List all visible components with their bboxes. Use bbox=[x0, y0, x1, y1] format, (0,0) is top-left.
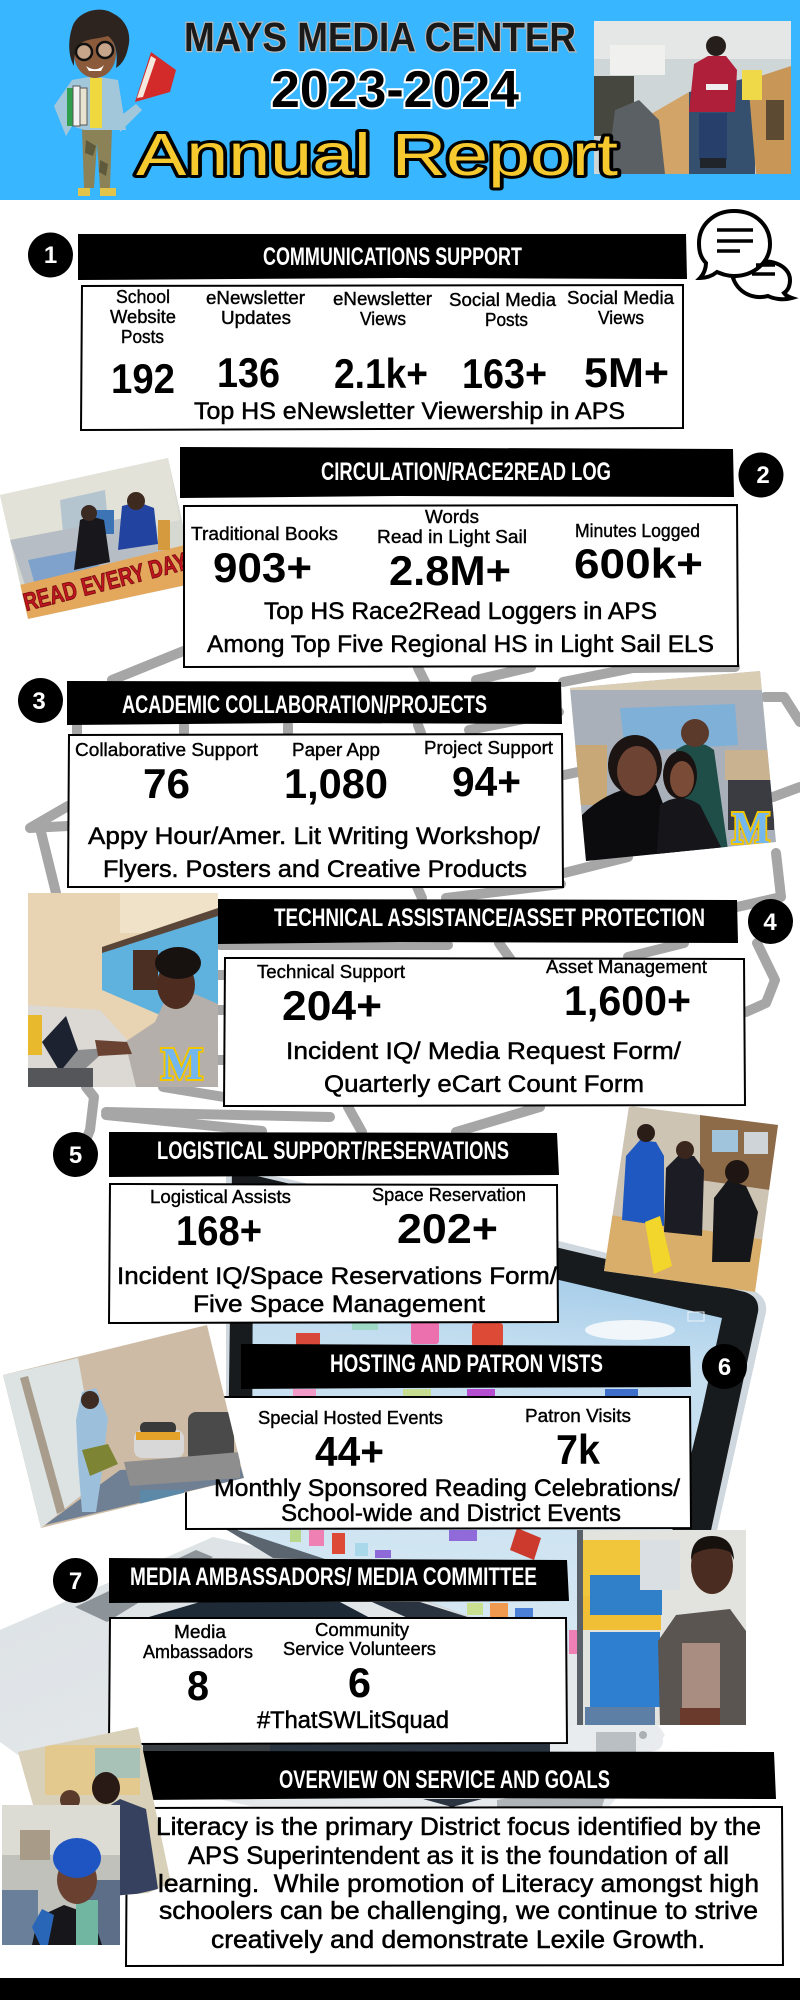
stat: technical support: 204+ bbox=[282, 982, 382, 1029]
stat: school website posts: Posts bbox=[121, 326, 164, 347]
logo letter: M bbox=[732, 802, 770, 853]
stat: logistical assists: 168+ bbox=[176, 1207, 262, 1254]
photo: staff selfie bbox=[565, 668, 780, 865]
number badge 7 bbox=[53, 1558, 98, 1603]
stat: community service volunteers bbox=[283, 1619, 436, 1706]
notes bbox=[286, 1038, 681, 1098]
photo: two staff members bbox=[18, 1727, 171, 1896]
stat: enewsletter updates bbox=[206, 287, 305, 396]
stat: community service volunteers: 6 bbox=[348, 1659, 371, 1706]
stats panel bbox=[109, 1618, 567, 1744]
stat: traditional books bbox=[191, 523, 338, 591]
stat: traditional books: 903+ bbox=[213, 544, 312, 591]
stat: patron visits bbox=[525, 1405, 631, 1473]
heading bar: COMMUNICATIONS SUPPORT bbox=[263, 243, 522, 271]
stat: words read: Words bbox=[425, 506, 479, 527]
photo: student at laptop bbox=[28, 893, 218, 1089]
number badge 4: 4 bbox=[763, 909, 777, 936]
stat: special hosted events: Special Hosted Events bbox=[258, 1407, 443, 1428]
heading bar bbox=[67, 681, 562, 725]
stat: patron visits: 7k bbox=[556, 1426, 601, 1473]
section 8: overview bbox=[2, 1725, 783, 1966]
photo: read every day bbox=[0, 458, 183, 619]
stat: space reservation: 202+ bbox=[397, 1205, 498, 1252]
number badge 6 bbox=[702, 1344, 747, 1389]
stat: technical support: Technical Support bbox=[257, 961, 405, 982]
stat: social media posts bbox=[449, 289, 557, 397]
heading bar: LOGISTICAL SUPPORT/RESERVATIONS bbox=[157, 1137, 509, 1165]
stat: enewsletter updates: Updates bbox=[221, 307, 291, 328]
stat: community service volunteers: Community bbox=[315, 1619, 410, 1640]
photo: cooking event bbox=[0, 1320, 250, 1530]
stat: school website posts: Website bbox=[110, 306, 176, 327]
heading bar bbox=[180, 447, 734, 498]
stat: social media posts: Social Media bbox=[449, 289, 557, 310]
stat: social media posts: 163+ bbox=[462, 350, 547, 397]
laptop screen bbox=[237, 1209, 722, 1680]
text panel bbox=[126, 1807, 783, 1966]
laptop hinge and keyboard bbox=[227, 1530, 328, 1560]
stat: words read: Read in Light Sail bbox=[377, 526, 527, 547]
section 1: communications support bbox=[28, 211, 792, 430]
section 5: logistical support bbox=[53, 1100, 785, 1323]
photo sign text: READ EVERY DAY bbox=[20, 548, 190, 617]
overview text: creatively and demonstrate Lexile Growth. bbox=[211, 1926, 705, 1954]
note: Top HS eNewsletter Viewership in APS bbox=[194, 398, 625, 425]
photo: three students bbox=[604, 1106, 778, 1292]
section 4: technical assistance bbox=[28, 893, 793, 1106]
icon: cartoon librarian avatar bbox=[54, 10, 176, 196]
stat: enewsletter updates: 136 bbox=[217, 349, 280, 396]
number badge 6: 6 bbox=[718, 1354, 731, 1381]
stat: space reservation bbox=[372, 1184, 526, 1252]
number badge 2: 2 bbox=[756, 462, 770, 489]
stat: paper app: Paper App bbox=[292, 739, 380, 760]
stats panel bbox=[68, 734, 563, 887]
stat: social media views: 5M+ bbox=[584, 349, 669, 396]
number badge 3 bbox=[18, 678, 63, 723]
stat: school website posts: 192 bbox=[111, 355, 175, 402]
stat: community service volunteers: Service Volunteers bbox=[283, 1638, 436, 1659]
stat: paper app: 1,080 bbox=[284, 760, 388, 807]
laptop base bbox=[0, 1537, 665, 1806]
stat: special hosted events bbox=[258, 1407, 443, 1475]
stats panel bbox=[109, 1184, 558, 1323]
stat: media ambassadors: Media bbox=[174, 1621, 227, 1642]
stat: words read bbox=[377, 506, 527, 594]
stat: social media views: Views bbox=[598, 307, 644, 328]
overview text bbox=[156, 1813, 761, 1954]
number badge 5: 5 bbox=[69, 1142, 82, 1169]
hashtag: #ThatSWLitSquad bbox=[257, 1707, 449, 1734]
app icons bbox=[290, 1320, 638, 1654]
number badge 7: 7 bbox=[69, 1568, 82, 1595]
stat: media ambassadors bbox=[143, 1621, 253, 1709]
title: school year: 2023-2024 bbox=[271, 61, 519, 119]
overview text: learning. While promotion of Literacy amongst high bbox=[158, 1870, 759, 1898]
logo letter: M bbox=[161, 1038, 203, 1089]
number badge 3: 3 bbox=[32, 688, 46, 715]
stat: words read: 2.8M+ bbox=[389, 547, 511, 594]
stat: social media views: Social Media bbox=[567, 287, 675, 308]
heading bar: ACADEMIC COLLABORATION/PROJECTS bbox=[122, 691, 487, 719]
section 7: media ambassadors bbox=[53, 1530, 746, 1744]
stat: space reservation: Space Reservation bbox=[372, 1184, 526, 1205]
section 3: academic collaboration bbox=[18, 668, 780, 887]
stat: enewsletter views: 2.1k+ bbox=[334, 350, 428, 397]
laptop background bbox=[0, 1165, 766, 1807]
overview text: APS Superintendent as it is the foundation of all bbox=[188, 1842, 729, 1870]
number badge 5 bbox=[53, 1132, 98, 1177]
number badge 2 bbox=[738, 452, 784, 498]
title: Annual Report: Annual Report bbox=[136, 122, 618, 188]
overview text: schoolers can be challenging, we continue to strive bbox=[159, 1897, 758, 1925]
header banner bbox=[0, 0, 800, 200]
footer band bbox=[0, 1978, 800, 2000]
icon: speech bubbles bbox=[699, 211, 792, 299]
notes: Incident IQ/Space Reservations Form/ bbox=[117, 1263, 557, 1290]
title: Mays Media Center: MAYS MEDIA CENTER bbox=[184, 14, 576, 60]
stat: media ambassadors: 8 bbox=[187, 1662, 209, 1709]
stat: asset management: 1,600+ bbox=[564, 977, 691, 1024]
stat: media ambassadors: Ambassadors bbox=[143, 1641, 253, 1662]
stat: collaborative support: Collaborative Support bbox=[75, 739, 258, 760]
notes bbox=[88, 823, 540, 883]
stat: minutes logged: 600k+ bbox=[574, 540, 703, 587]
stat: paper app bbox=[284, 739, 388, 807]
overview text: Literacy is the primary District focus identified by the bbox=[156, 1813, 761, 1841]
notes: Among Top Five Regional HS in Light Sail ELS bbox=[207, 631, 714, 658]
stat: patron visits: Patron Visits bbox=[525, 1405, 631, 1426]
photo: student with blue hat bbox=[2, 1805, 120, 1945]
stat: school website posts bbox=[110, 286, 176, 402]
photo: student with book and poster bbox=[577, 1530, 746, 1725]
header photo: student reading bbox=[594, 21, 791, 174]
notes: Five Space Management bbox=[193, 1291, 485, 1318]
stat: collaborative support bbox=[75, 739, 258, 807]
stat: collaborative support: 76 bbox=[143, 760, 190, 807]
stats panel bbox=[186, 1397, 691, 1529]
section 6: hosting and patron visits bbox=[0, 1320, 747, 1530]
heading bar: HOSTING AND PATRON VISTS bbox=[330, 1350, 603, 1378]
stats panel bbox=[184, 505, 738, 667]
notes bbox=[207, 598, 714, 658]
stat: enewsletter views: eNewsletter bbox=[333, 288, 432, 309]
stat: enewsletter updates: eNewsletter bbox=[206, 287, 305, 308]
heading bar bbox=[218, 899, 738, 944]
stat: technical support bbox=[257, 961, 405, 1029]
heading bar: OVERVIEW ON SERVICE AND GOALS bbox=[279, 1766, 610, 1794]
notes: Top HS Race2Read Loggers in APS bbox=[264, 598, 657, 625]
heading bar bbox=[241, 1344, 691, 1389]
stat: project support bbox=[424, 737, 553, 805]
stat: social media views bbox=[567, 287, 675, 396]
number badge 1: 1 bbox=[44, 242, 57, 269]
stat: logistical assists bbox=[150, 1186, 291, 1254]
stat: enewsletter views: Views bbox=[360, 308, 406, 329]
number badge 4 bbox=[748, 899, 793, 944]
number badge 1 bbox=[28, 232, 73, 278]
stat: asset management: Asset Management bbox=[546, 956, 707, 977]
heading bar bbox=[78, 234, 687, 280]
notes bbox=[214, 1475, 680, 1527]
laptop screen rim and bezel bbox=[226, 1165, 766, 1660]
background: gray line sketch bbox=[30, 650, 800, 1150]
stat: minutes logged bbox=[574, 520, 703, 587]
stat: traditional books: Traditional Books bbox=[191, 523, 338, 544]
stat: project support: 94+ bbox=[452, 758, 521, 805]
notes bbox=[117, 1263, 557, 1318]
stat: enewsletter views bbox=[333, 288, 432, 397]
stat: school website posts: School bbox=[116, 286, 170, 307]
stats panel bbox=[81, 285, 683, 430]
stat: social media posts: Posts bbox=[485, 309, 528, 330]
heading bar: CIRCULATION/RACE2READ LOG bbox=[321, 458, 611, 486]
stat: logistical assists: Logistical Assists bbox=[150, 1186, 291, 1207]
heading bar bbox=[109, 1558, 569, 1603]
section 2: circulation bbox=[0, 447, 784, 667]
notes: Monthly Sponsored Reading Celebrations/ bbox=[214, 1475, 680, 1502]
stat: project support: Project Support bbox=[424, 737, 553, 758]
stats panel bbox=[224, 956, 745, 1106]
stat: minutes logged: Minutes Logged bbox=[575, 520, 700, 541]
heading bar: MEDIA AMBASSADORS/ MEDIA COMMITTEE bbox=[130, 1563, 537, 1591]
heading bar bbox=[143, 1751, 776, 1800]
notes: Incident IQ/ Media Request Form/ bbox=[286, 1038, 681, 1065]
stat: asset management bbox=[546, 956, 707, 1024]
notes: School-wide and District Events bbox=[281, 1500, 621, 1527]
notes: Flyers. Posters and Creative Products bbox=[103, 856, 527, 883]
notes: Appy Hour/Amer. Lit Writing Workshop/ bbox=[88, 823, 540, 850]
heading bar bbox=[109, 1132, 559, 1177]
stat: special hosted events: 44+ bbox=[315, 1428, 384, 1475]
notes: Quarterly eCart Count Form bbox=[324, 1071, 644, 1098]
